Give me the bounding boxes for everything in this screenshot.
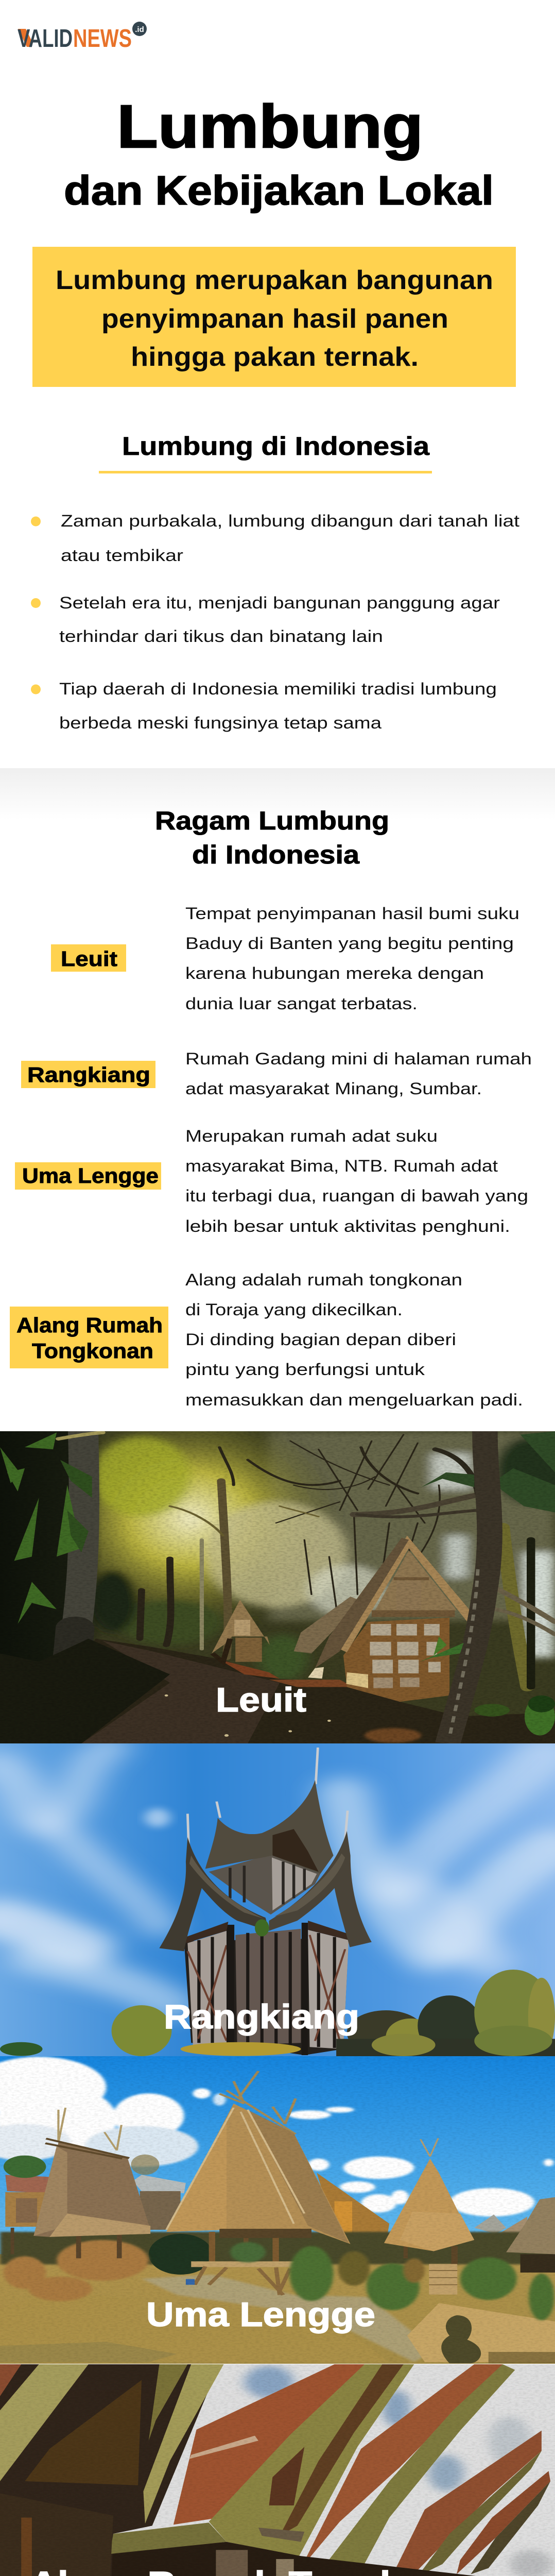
description: Alang Rumah Tongkonan: pintu yang berfungsi untuk: [185, 1360, 425, 1379]
dark lower structure: [106, 2542, 495, 2576]
bullet 3: Tiap daerah di Indonesia memiliki tradisi lumbung: [59, 680, 497, 698]
centre hut: [166, 2071, 351, 2295]
description: Leuit: Baduy di Banten yang begitu penting: [185, 934, 514, 953]
heading: Ragam Lumbung di Indonesia: [155, 806, 389, 869]
logo: Validnews.id: .id: [135, 25, 144, 34]
clouds: [0, 1748, 552, 2004]
dry grass: [4, 2240, 149, 2301]
bullet 3: berbeda meski fungsinya tetap sama: [59, 714, 381, 732]
left gable and bands: [0, 2364, 219, 2576]
label: Rangkiang: Rangkiang: [164, 1997, 359, 2036]
fern fronds: [0, 1432, 92, 1624]
banana leaves: [421, 1431, 555, 1513]
heading: Lumbung di Indonesia: [99, 432, 432, 473]
small hut: [212, 1600, 270, 1662]
description: Rangkiang: Rumah Gadang mini di halaman rumah: [185, 1049, 532, 1068]
bushes: [0, 1970, 555, 2056]
description: Uma Lengge: masyarakat Bima, NTB. Rumah adat: [185, 1157, 498, 1175]
logo: Validnews.id: VALID: [18, 25, 73, 53]
green shrubs: [230, 2242, 554, 2320]
photo panel: Alang Rumah Tongkonan: [0, 2364, 555, 2576]
description: Alang Rumah Tongkonan: memasukkan dan mengeluarkan padi.: [185, 1391, 523, 1409]
photo panel: Uma Lengge: [0, 2056, 555, 2364]
title: dan Kebijakan Lokal: [64, 167, 494, 213]
thatched back roof: [294, 1597, 361, 1653]
tree shadows on the left: [0, 1431, 102, 1743]
tag: Rangkiang: [21, 1061, 155, 1088]
upper roof: [205, 1780, 334, 1874]
shadow on ground: [441, 2315, 481, 2363]
heading: Ragam Lumbung di Indonesia: Ragam Lumbung: [155, 806, 389, 835]
trunks and branches: [58, 1431, 555, 1725]
lower walls: [184, 1938, 349, 2055]
description: Alang Rumah Tongkonan: [185, 1270, 523, 1409]
logo: Validnews.id: [18, 22, 147, 53]
tag: Rangkiang: Rangkiang: [27, 1063, 150, 1087]
spires: [187, 1748, 348, 1855]
photo panel: Leuit: [0, 1401, 555, 1743]
description: Uma Lengge: Merupakan rumah adat suku: [185, 1127, 438, 1145]
ground: [0, 2254, 555, 2364]
tag: Leuit: Leuit: [61, 947, 117, 971]
description: Uma Lengge: [185, 1127, 528, 1235]
bullet 1: [31, 512, 519, 565]
ground and path: [42, 1639, 555, 1743]
bullet 1: Zaman purbakala, lumbung dibangun dari tanah liat: [61, 512, 519, 530]
upper walls: [209, 1855, 320, 1914]
tag: Alang Rumah Tongkonan: [10, 1307, 168, 1368]
description: Alang Rumah Tongkonan: di Toraja yang dikecilkan.: [185, 1300, 403, 1319]
label: Uma Lengge: Uma Lengge: [146, 2295, 375, 2333]
bullet 2: terhindar dari tikus dan binatang lain: [59, 627, 383, 646]
callout: definition of lumbung: penyimpanan hasil panen: [101, 304, 448, 334]
foreground leaves: [420, 1637, 555, 1735]
fine branch mesh: [219, 1435, 440, 1607]
background buildings: [5, 2175, 49, 2193]
callout: definition of lumbung: [32, 247, 516, 387]
heading: Lumbung di Indonesia: Lumbung di Indonesia: [122, 432, 430, 461]
logo: Validnews.id: NEWS: [73, 25, 132, 53]
roofs: [457, 2471, 550, 2574]
sky: [244, 2366, 552, 2576]
title: [64, 93, 494, 213]
heading: Ragam Lumbung di Indonesia: di Indonesia: [192, 840, 360, 869]
description: Rangkiang: adat masyarakat Minang, Sumbar.: [185, 1079, 482, 1098]
tag: Uma Lengge: Uma Lengge: [22, 1164, 159, 1188]
tag: Alang Rumah Tongkonan: Tongkonan: [32, 1339, 153, 1363]
tag: Leuit: [51, 944, 126, 972]
bullet 1: atau tembikar: [61, 546, 183, 565]
clouds: [0, 2057, 553, 2216]
lower roofs: [159, 1837, 269, 1951]
bullet 3: [31, 680, 497, 732]
far right hut: [506, 2197, 555, 2254]
panel: types of lumbung: [10, 904, 532, 1409]
description: Rangkiang: [185, 1049, 532, 1098]
tag: Alang Rumah Tongkonan: Alang Rumah: [16, 1313, 163, 1337]
bullet 2: [31, 594, 500, 646]
description: Uma Lengge: itu terbagi dua, ruangan di bawah yang: [185, 1187, 528, 1205]
left hut: [11, 2108, 150, 2258]
right hut: [384, 2138, 474, 2295]
description: Leuit: [185, 904, 519, 1013]
callout: definition of lumbung: Lumbung merupakan bangunan: [56, 265, 493, 295]
description: Uma Lengge: lebih besar untuk aktivitas penghuni.: [185, 1217, 510, 1235]
callout: definition of lumbung: hingga pakan ternak.: [131, 342, 419, 372]
bullet 2: Setelah era itu, menjadi bangunan panggung agar: [59, 594, 500, 612]
title: Lumbung: [117, 93, 423, 161]
photo panel: Rangkiang: [0, 1743, 555, 2056]
description: Alang Rumah Tongkonan: Alang adalah rumah tongkonan: [185, 1270, 462, 1289]
label: Leuit: Leuit: [216, 1681, 306, 1719]
gable details: [258, 2528, 304, 2542]
bullet list: [31, 512, 519, 732]
right trunk: [448, 1431, 490, 1743]
description: Leuit: dunia luar sangat terbatas.: [185, 994, 418, 1013]
big hut: [308, 1536, 471, 1702]
section background fade: [0, 768, 555, 820]
description: Alang Rumah Tongkonan: Di dinding bagian depan diberi: [185, 1330, 456, 1349]
description: Leuit: Tempat penyimpanan hasil bumi suku: [185, 904, 519, 923]
description: Leuit: karena hubungan mereka dengan: [185, 964, 484, 982]
